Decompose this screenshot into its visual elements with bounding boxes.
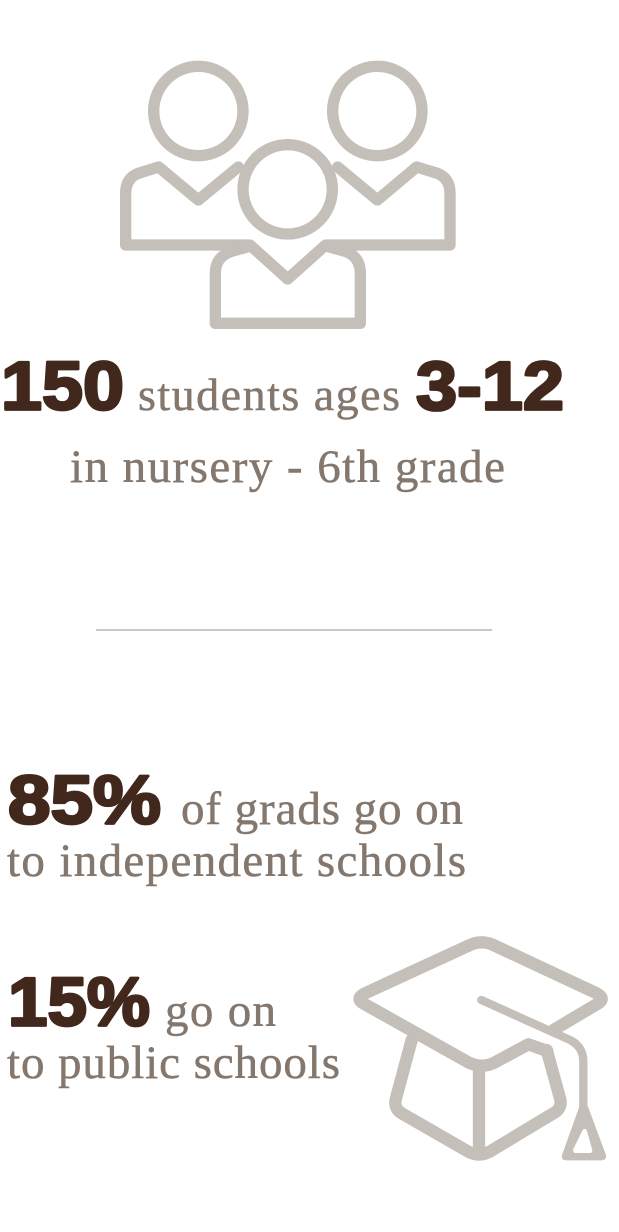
stat: 15% to public schools: to public schools xyxy=(7,1037,340,1089)
stat: 150 students ages 3-12: 150 xyxy=(1,348,124,424)
stat: 15% to public schools: go on xyxy=(165,985,276,1037)
stat: 150 students ages 3-12 xyxy=(1,348,564,424)
stat: 85% to independent schools: to independent schools xyxy=(7,835,466,887)
stat: 85% to independent schools xyxy=(7,762,466,887)
stat: 15% to public schools: 15% xyxy=(8,964,150,1040)
text: in nursery - 6th grade: in nursery - 6th grade xyxy=(70,441,505,493)
stat: 15% to public schools xyxy=(7,964,340,1089)
stat: 150 students ages 3-12: 3-12 xyxy=(416,348,564,424)
stat: 85% to independent schools: 85% xyxy=(8,762,161,838)
icon: graduation cap xyxy=(359,942,606,1160)
stat: 85% to independent schools: of grads go on xyxy=(181,783,463,835)
icon: three students xyxy=(126,66,450,323)
stat: 150 students ages 3-12: students ages xyxy=(138,369,400,420)
